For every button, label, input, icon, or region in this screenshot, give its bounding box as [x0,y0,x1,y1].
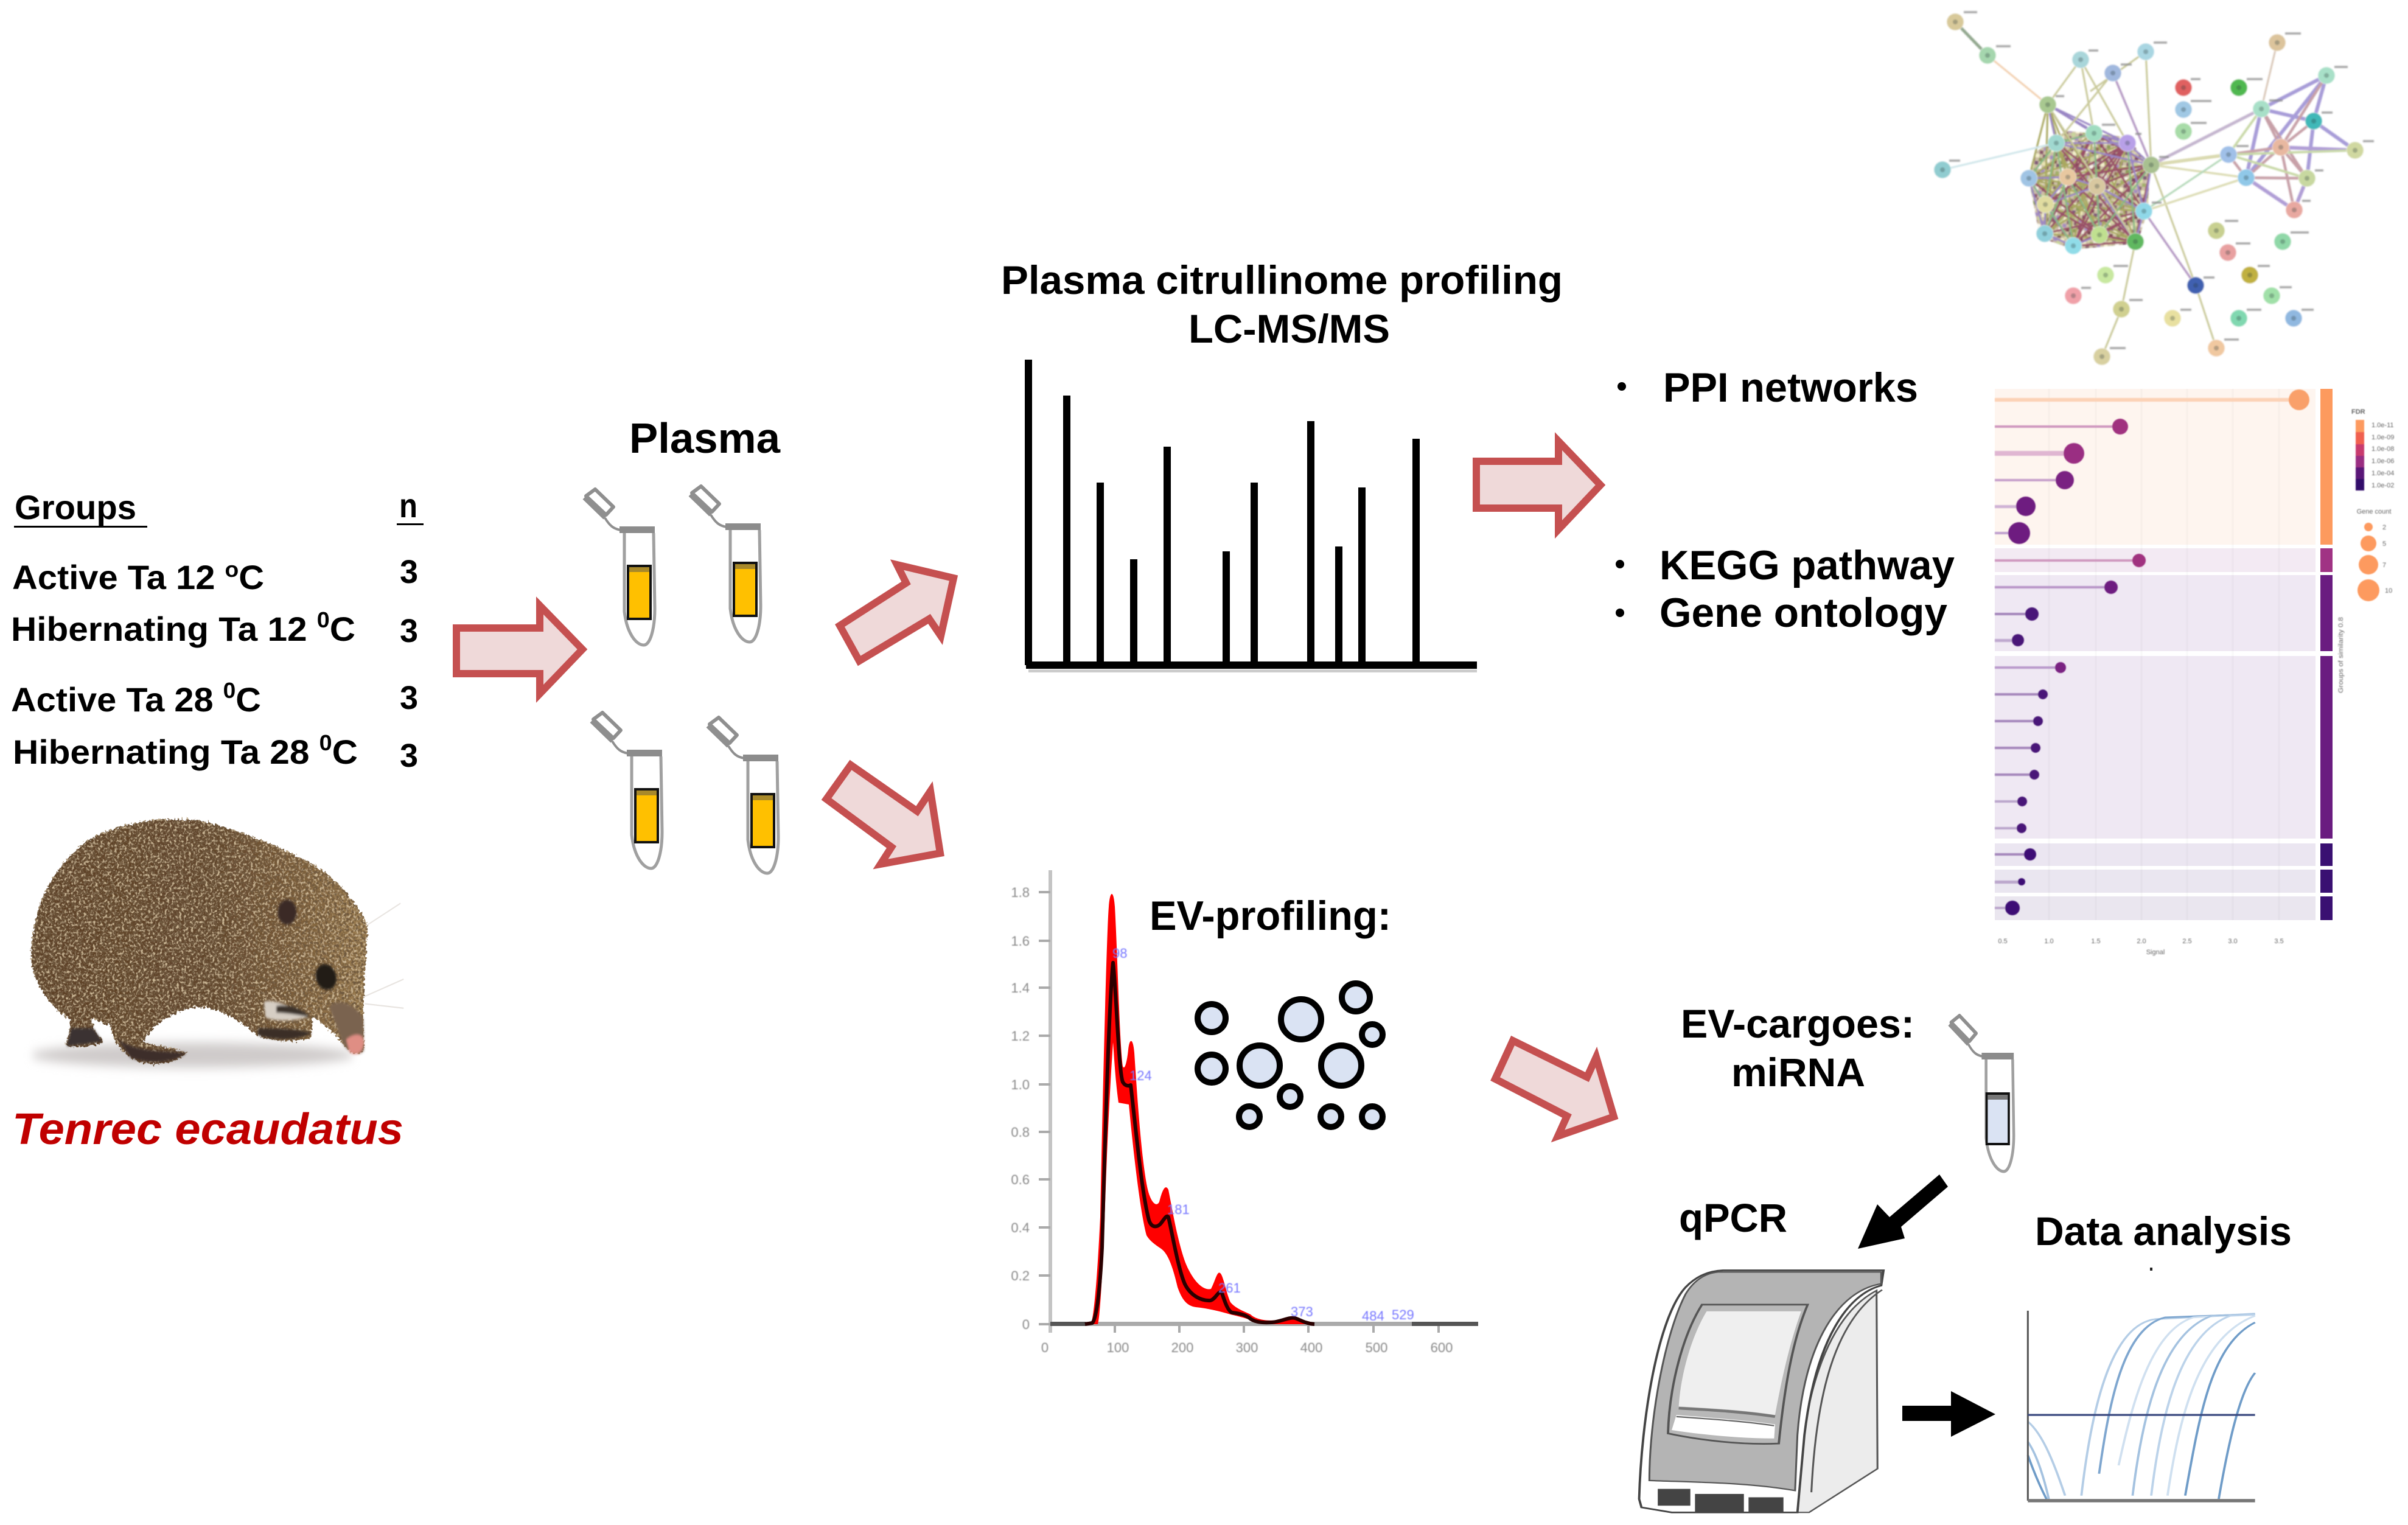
chart: EV size distribution [1011,870,1478,1355]
x axis labels: 2.5 [2182,938,2192,945]
list: Gene ontology: Gene ontology [1659,590,1947,636]
x axis labels: 100 [1107,1340,1129,1355]
legend: FDR colour scale [2351,408,2394,490]
group colour bar [2320,389,2333,920]
heading: EV profiling: EV-profiling: [1150,893,1391,939]
arrow: EV profiling to cargoes [1495,1041,1614,1136]
arrow: tube to qPCR [1858,1174,1948,1249]
n values: 3 [400,613,418,649]
plasma tubes [584,486,778,873]
lollipop stems and markers [1995,389,2309,915]
x axis labels: 1.0 [2044,938,2054,945]
icon: extracellular vesicles [1198,983,1383,1127]
axes [1039,870,1478,1333]
y axis labels: 1.4 [1011,980,1030,996]
group label: hibernating 28 C: C [332,733,358,771]
legend: FDR colour scale: 1.0e-11 [2371,422,2394,429]
heading: data analysis: Data analysis [2035,1209,2292,1254]
row backgrounds [1995,389,2316,920]
legend: count circles: 10 [2385,587,2392,595]
chart: qPCR amplification curves [2028,1311,2255,1501]
group label: hibernating 12 C: Hibernating Ta 12 [11,610,295,648]
x axis labels: 200 [1171,1340,1193,1355]
n values: 3 [400,680,418,716]
icon: qPCR machine [1639,1271,1883,1512]
group label: active 12 C: o [225,557,239,582]
icon: plasma tube 4 [708,717,778,873]
y axis labels: 1.0 [1011,1077,1030,1092]
y axis labels: 0.2 [1011,1268,1030,1283]
heading: plasma citrullinome profiling: LC-MS/MS [1188,306,1390,351]
y axis labels: 0.8 [1011,1125,1030,1140]
legend: FDR colour scale: 1.0e-04 [2371,470,2394,477]
group label: active 28 C: 0 [223,678,236,703]
legend: count circles: 7 [2382,562,2386,569]
heading: EV cargoes miRNA: miRNA [1731,1050,1865,1095]
n values [400,554,418,774]
y axis labels: 1.2 [1011,1028,1030,1044]
heading: EV cargoes miRNA [1681,1001,1914,1095]
y axis labels: 0 [1022,1317,1030,1332]
icon: tenrec animal [31,819,403,1067]
n values: 3 [400,554,418,590]
legend: count circles: 2 [2382,524,2386,531]
legend: FDR colour scale: FDR [2351,408,2365,416]
group label: active 12 C: C [239,558,264,596]
peak labels: 181 [1167,1202,1190,1217]
x axis labels: 1.5 [2091,938,2101,945]
arrow: groups to plasma [456,605,582,694]
peak labels: 98 [1112,946,1127,961]
icon: plasma tube 1 [584,489,655,645]
icon: plasma tube 3 [592,713,662,868]
y axis labels [1011,885,1030,1332]
group label: hibernating 12 C: 0 [317,607,330,632]
heading: Plasma: Plasma [629,414,781,462]
x axis labels: 500 [1366,1340,1387,1355]
Groups column heading: Groups [15,488,136,526]
chart: PPI network [1934,12,2374,365]
chart: enrichment lollipop plot [1995,389,2394,956]
legend: count circles: Gene count [2357,508,2391,515]
y axis labels: 1.6 [1011,933,1030,949]
n values: 3 [400,738,418,774]
peak labels: 124 [1129,1068,1152,1083]
group label: hibernating 28 C: Hibernating Ta 28 [13,733,296,771]
error band [1091,894,1314,1324]
group label: active 28 C: Active Ta 28 [11,680,208,719]
y axis labels: 0.6 [1011,1172,1030,1187]
n column heading: n [399,486,417,525]
group label: hibernating 28 C: 0 [319,730,332,755]
peak labels: 529 [1392,1307,1414,1322]
heading: plasma citrullinome profiling: Plasma citrullinome profiling [1001,257,1563,302]
chart: LC-MS/MS spectrum bars [1025,360,1477,672]
legend: count circles [2357,508,2392,601]
arrow: qPCR to analysis [1902,1391,1995,1437]
x axis labels [1998,938,2284,956]
peak labels: 261 [1218,1280,1241,1296]
peak labels: 373 [1291,1304,1313,1319]
x axis labels: 300 [1236,1340,1258,1355]
arrow: plasma to EV profiling [826,765,940,864]
icon: miRNA tube [1950,1016,2014,1171]
mean curve [1085,963,1314,1324]
x axis labels: 400 [1300,1340,1322,1355]
tenrec face and paw details [67,899,364,1062]
heading: groups table [11,486,424,774]
y axis group label: Groups of similarity 0.8 [2337,617,2345,693]
group label: hibernating 12 C: C [330,610,355,648]
legend: FDR colour scale: 1.0e-09 [2371,434,2394,441]
peak labels: 484 [1362,1308,1384,1324]
y axis labels: 1.8 [1011,885,1030,900]
list: KEGG pathway: KEGG pathway [1659,542,1955,588]
legend: FDR colour scale: 1.0e-08 [2371,445,2394,453]
x axis labels: 600 [1431,1340,1453,1355]
arrow: plasma to citrullinome [840,565,954,661]
species name: Tenrec ecaudatus [12,1105,403,1154]
x axis labels: 3.5 [2274,938,2284,945]
group label: active 12 C: Active Ta 12 [12,558,209,596]
legend: FDR colour scale: 1.0e-02 [2371,482,2394,489]
y axis labels: 0.4 [1011,1220,1030,1235]
x axis labels [1041,1340,1453,1355]
heading: plasma citrullinome profiling [1001,257,1563,351]
x axis labels: 0 [1041,1340,1049,1355]
arrow: citrullinome to analyses [1476,441,1600,529]
x axis labels: 0.5 [1998,938,2008,945]
x axis labels: 2.0 [2137,938,2146,945]
legend: count circles: 5 [2382,540,2386,548]
peak labels [1112,946,1414,1324]
list: PPI networks: PPI networks [1663,365,1918,411]
heading: EV cargoes miRNA: EV-cargoes: [1681,1001,1914,1046]
x axis labels: 3.0 [2228,938,2238,945]
legend: FDR colour scale: 1.0e-06 [2371,458,2394,465]
icon: plasma tube 2 [690,486,761,642]
heading: qPCR: qPCR [1679,1195,1787,1240]
x axis labels: Signal [2146,949,2165,956]
group label: active 28 C: C [236,680,261,719]
